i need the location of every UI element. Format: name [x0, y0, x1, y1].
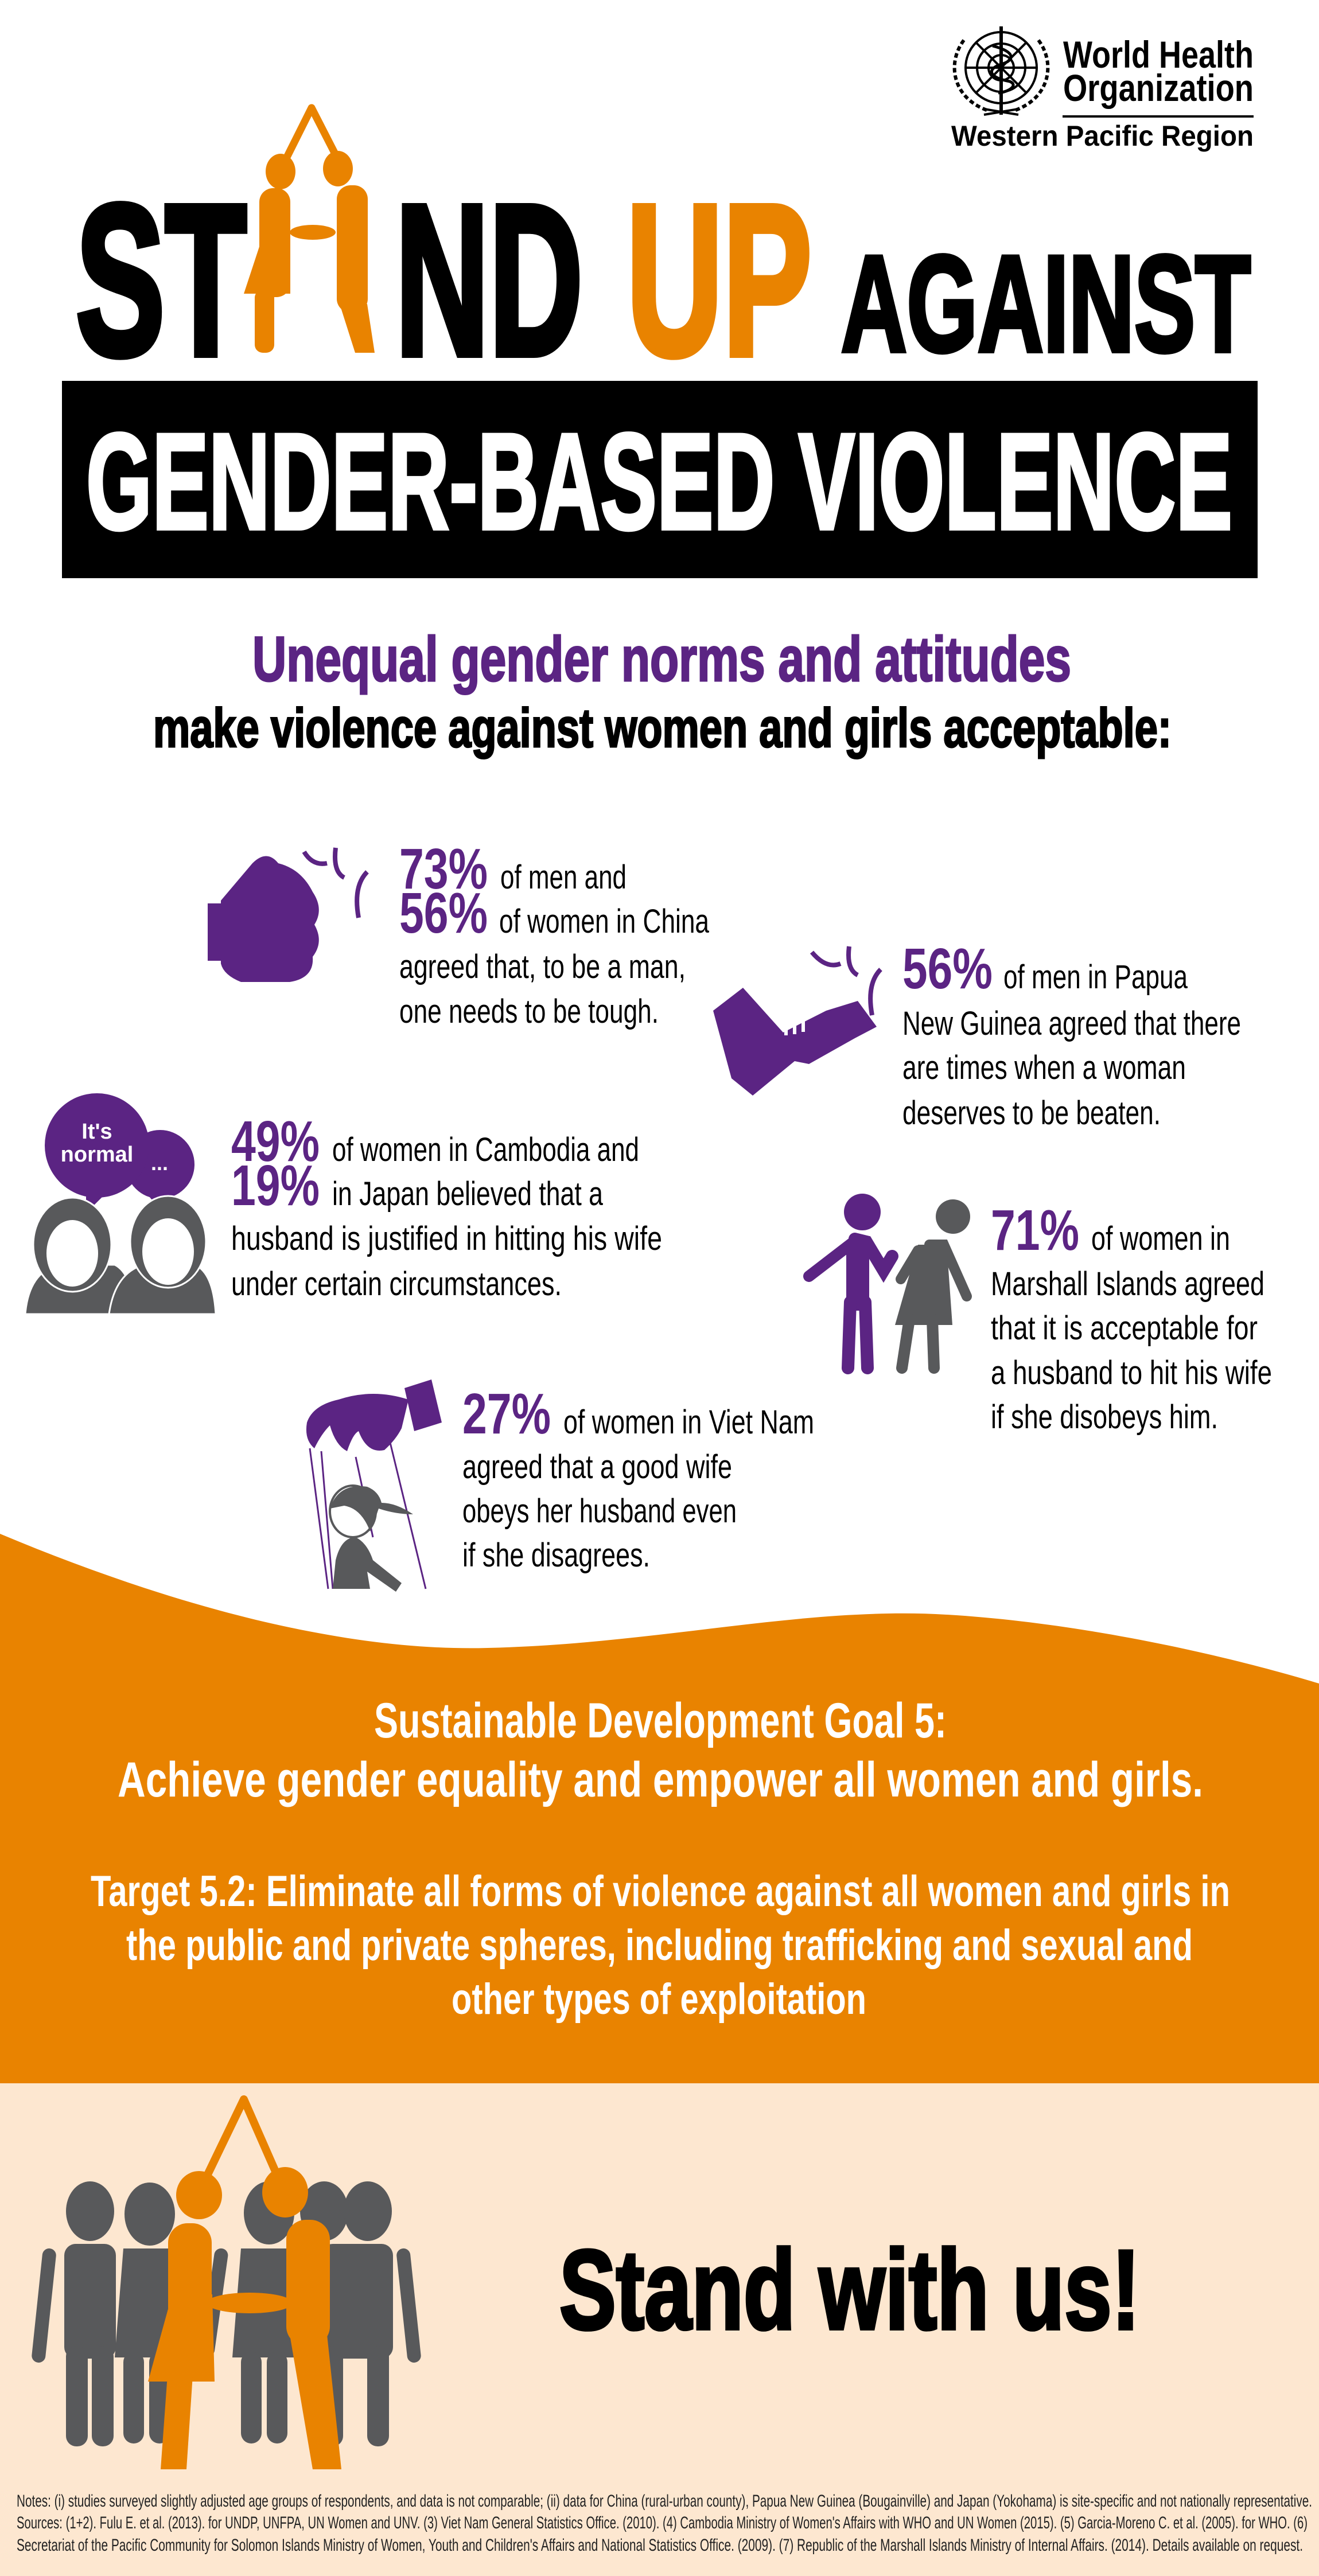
title: STAND UP AGAINST: ST	[76, 161, 247, 400]
stat: 56% PNG	[902, 937, 1241, 1132]
stat: 71% Marshall Islands: that it is acceptable for	[991, 1310, 1258, 1347]
WHO logo	[951, 26, 1254, 152]
stat: 73% / 56% China: 73%	[399, 837, 488, 901]
icon: man hitting woman	[809, 1194, 970, 1368]
stat: 27% Viet Nam: of women in Viet Nam	[563, 1404, 814, 1441]
stat: 71% Marshall Islands: if she disobeys him.	[991, 1398, 1218, 1436]
stat: 56% PNG: 56%	[902, 937, 993, 1001]
puppet girl	[330, 1486, 413, 1592]
stat: 49% / 19% Cambodia Japan: husband is justified in hitting his wife	[231, 1220, 662, 1257]
speech bubble: It's normal	[45, 1093, 194, 1213]
stat: 27% Viet Nam: agreed that a good wife	[462, 1448, 732, 1486]
stat: 27% Viet Nam: if she disagrees.	[462, 1537, 650, 1574]
icon: two figures forming the letter A	[244, 108, 375, 353]
stat: 56% PNG: deserves to be beaten.	[902, 1094, 1161, 1132]
stat: 71% Marshall Islands: of women in	[1091, 1220, 1230, 1257]
stat: 71% Marshall Islands: 71%	[991, 1198, 1079, 1262]
stat: 27% Viet Nam: obeys her husband even	[462, 1492, 737, 1530]
WHO logo: Western Pacific Region	[951, 120, 1254, 152]
orange SDG section with wave	[0, 1534, 1319, 2083]
icon: boot	[713, 946, 881, 1096]
WHO name text: World Health	[1063, 33, 1254, 76]
subtitle: Unequal gender norms and attitudes	[252, 624, 1071, 695]
icon: WHO emblem	[955, 26, 1048, 115]
stat: 49% / 19% Cambodia Japan	[231, 1109, 662, 1303]
stat: 71% Marshall Islands	[991, 1198, 1272, 1436]
WHO logo: Organization	[1063, 67, 1254, 109]
stat: 73% / 56% China: one needs to be tough.	[399, 993, 659, 1030]
stat: 49% / 19% Cambodia Japan: 19%	[231, 1153, 320, 1218]
notes and sources	[17, 2492, 1312, 2555]
speech bubble: It's normal: normal	[61, 1143, 133, 1167]
stat: 73% / 56% China: of women in China	[499, 903, 710, 940]
stat: 49% / 19% Cambodia Japan: of women in Cambodia and	[332, 1131, 639, 1168]
title: STAND UP AGAINST: ND	[395, 161, 583, 400]
stat: 49% / 19% Cambodia Japan: under certain circumstances.	[231, 1265, 562, 1303]
speech bubble: It's normal: ...	[151, 1151, 168, 1175]
stat: 27% Viet Nam	[462, 1382, 814, 1574]
stat: 49% / 19% Cambodia Japan: 49%	[231, 1109, 320, 1174]
title: STAND UP AGAINST: UP	[627, 161, 812, 400]
SDG heading: Sustainable Development Goal 5:	[374, 1693, 947, 1748]
stat: 73% / 56% China: of men and	[500, 859, 627, 896]
stat: 56% PNG: are times when a woman	[902, 1049, 1186, 1086]
stat: 56% PNG: of men in Papua	[1003, 958, 1188, 996]
icon: two women with speech bubbles	[25, 1093, 216, 1314]
icon: fist	[208, 848, 367, 982]
subtitle	[153, 624, 1172, 759]
stat: 49% / 19% Cambodia Japan: in Japan believed that a	[332, 1175, 604, 1213]
orange SDG section with wave: other types of exploitation	[452, 1975, 866, 2024]
stat: 27% Viet Nam: 27%	[462, 1382, 551, 1446]
icon: puppet hand	[306, 1379, 442, 1592]
stat: 73% / 56% China	[399, 837, 710, 1030]
speech bubble: It's normal: It's	[81, 1120, 112, 1144]
icon: group of people with two orange figures	[31, 2099, 422, 2469]
stat: 73% / 56% China: agreed that, to be a man,	[399, 948, 686, 985]
bottom peach panel	[0, 2083, 1319, 2576]
title: STAND UP AGAINST	[76, 108, 1251, 400]
stat: 73% / 56% China: 56%	[399, 881, 488, 945]
call to action: Stand with us!	[559, 2227, 1140, 2353]
